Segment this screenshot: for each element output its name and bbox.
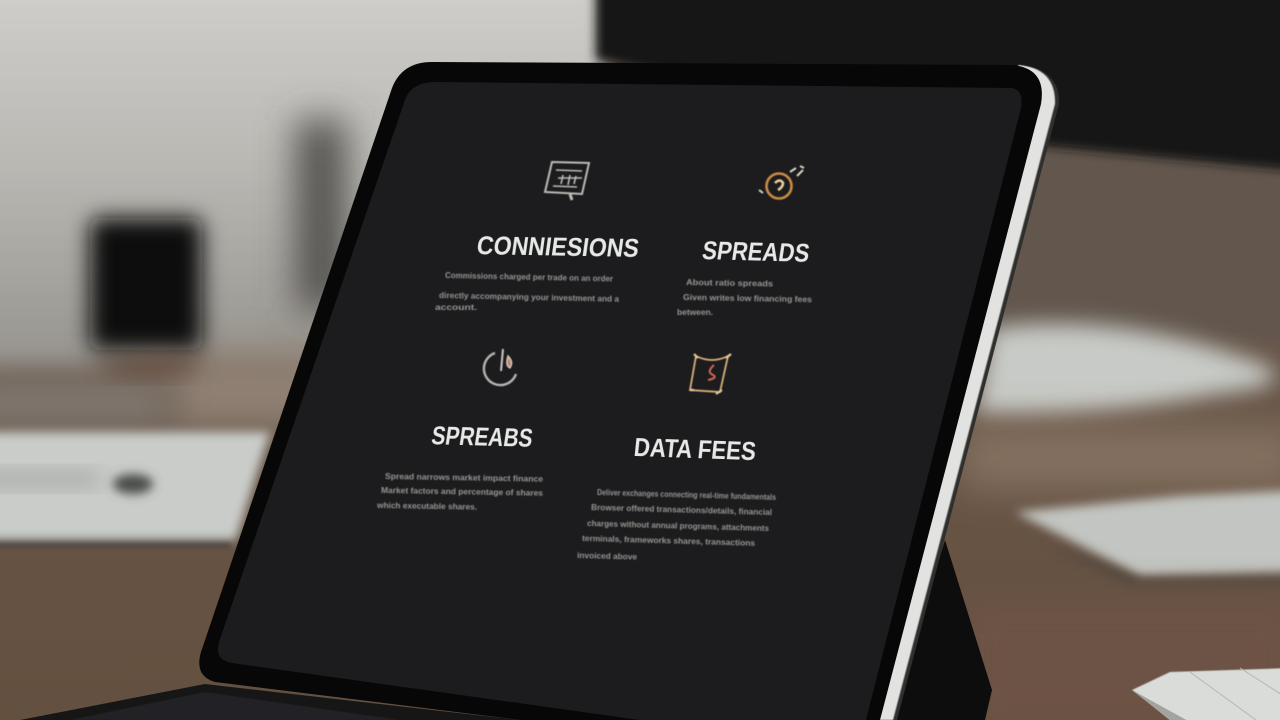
text: spreads lower description: which executable shares. [376,500,477,512]
text: spreads lower description: Spread narrows market impact finance [385,471,543,484]
white pad right [1015,490,1280,576]
text: spreads description: About ratio spreads [686,277,774,289]
pen on paper [113,474,153,494]
table top left [170,350,350,430]
dark blurred object behind tablet [296,120,346,310]
text: commissions description: directly accompanying your investment and a [439,290,619,304]
paper dark stripe [0,472,100,486]
text: spreads lower description: Market factors and percentage of shares [381,485,543,498]
heading: spreads: SPREADS [700,235,812,268]
tablet body [199,62,1042,720]
text: data fees description: terminals, frameworks shares, transactions [582,533,755,548]
panel: spreads top right [677,166,812,317]
tablet outer edge [880,65,1059,720]
table right [960,425,1280,490]
dark monitor [596,0,1280,172]
icon: data frame [690,354,731,394]
panel: spreads lower left [376,349,543,512]
text: data fees description: Deliver exchanges connecting real-time fundamentals [597,487,776,502]
text: spreads description: Given writes low financing fees [683,292,812,304]
tablet white edge [878,65,1055,720]
heading: spreabs: SPREABS [430,420,535,453]
panel: commissions [435,162,641,312]
right wall [900,140,1280,340]
text: commissions description: account. [435,302,477,312]
text: spreads description [677,277,812,317]
mug warm reflection [98,357,202,375]
text: spreads lower description [376,471,543,512]
keyboard at bottom left [20,684,520,720]
panel: data fees [577,354,776,562]
tablet [199,62,1059,720]
tablet screen [218,82,1022,720]
icon: power gauge [484,349,516,385]
text: commissions description [435,270,619,312]
text: commissions description: Commissions charged per trade on an order [445,270,614,284]
tablet stand [890,540,992,720]
paper stack shadow [0,540,230,547]
lower right table [960,600,1280,720]
text: data fees description: Browser offered transactions/details, financial [591,502,772,517]
icon: trading screen [545,162,589,200]
text: data fees description: invoiced above [577,550,638,562]
white keyboard bottom right [1132,668,1280,720]
icon: coin [759,166,804,198]
pad shadow [1040,540,1280,586]
heading: data fees: DATA FEES [632,432,758,466]
text: spreads description: between. [677,307,713,317]
dark mug [90,218,202,350]
white plate right [975,324,1276,417]
text: data fees description [577,487,776,562]
left wall [0,0,608,370]
paper stack left [0,432,270,540]
text: data fees description: charges without annual programs, attachments [587,518,769,533]
heading: commissions: CONNIESIONS [475,230,641,263]
